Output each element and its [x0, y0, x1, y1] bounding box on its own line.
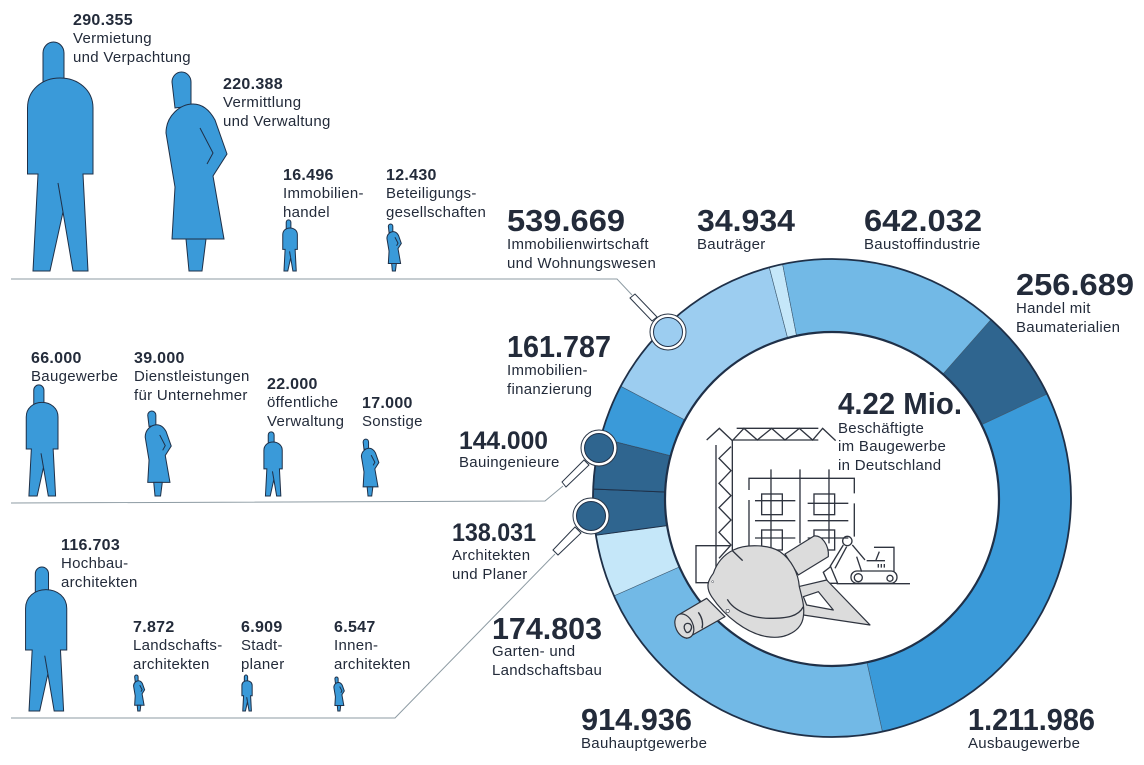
center total: im Baugewerbe — [838, 438, 946, 455]
segment: Immobilienwirtschaft und Wohnungswesen — [621, 267, 788, 420]
label: Immobilienfinanzierung — [507, 330, 611, 398]
segment: Handel mit Baumaterialien — [943, 320, 1047, 425]
label: Stadtplaner — [241, 619, 284, 673]
rolled plan lower — [671, 598, 725, 641]
label: Handel mit Baumaterialien: Baumaterialien — [1016, 319, 1120, 336]
label: Beteiligungsgesellschaften: Beteiligungs- — [386, 185, 477, 202]
label: Bauhauptgewerbe: 914.936 — [581, 703, 692, 737]
center total — [838, 387, 962, 474]
donut chart — [593, 259, 1071, 737]
figure: Stadtplaner — [242, 675, 252, 711]
label: Architekten und Planer: Architekten — [452, 547, 530, 564]
label: Ausbaugewerbe — [968, 703, 1095, 752]
excavator — [823, 536, 897, 583]
label: öffentliche Verwaltung — [267, 376, 344, 430]
label: Handel mit Baumaterialien: 256.689 — [1016, 268, 1134, 302]
label: Immobilienwirtschaft: 539.669 — [507, 204, 625, 238]
figure: öffentliche Verwaltung — [264, 432, 282, 496]
label: Sonstige: 17.000 — [362, 395, 413, 412]
label: Architekten und Planer: und Planer — [452, 566, 528, 583]
label: Vermietung und Verpachtung: 290.355 — [73, 12, 133, 29]
label: Baustoffindustrie: Baustoffindustrie — [864, 236, 981, 253]
label: Sonstige: Sonstige — [362, 413, 423, 430]
label: Immobilienwirtschaft — [507, 204, 656, 272]
label: Immobilienhandel: handel — [283, 204, 330, 221]
label: Immobilienhandel: Immobilien- — [283, 185, 364, 202]
label: Immobilienwirtschaft: Immobilienwirtschaft — [507, 236, 649, 253]
label: Vermietung und Verpachtung — [73, 12, 191, 66]
set square — [798, 580, 870, 625]
label: Innenarchitekten: 6.547 — [334, 619, 376, 636]
label: Baustoffindustrie: 642.032 — [864, 204, 982, 238]
label: Bauträger — [697, 204, 795, 253]
label: Vermietung und Verpachtung: Vermietung — [73, 30, 152, 47]
figure: Landschaftsarchitekten — [134, 675, 145, 711]
center total: in Deutschland — [838, 457, 941, 474]
label: Vermittlung und Verwaltung: und Verwaltung — [223, 113, 331, 130]
label: Sonstige — [362, 395, 423, 430]
label: Baugewerbe — [31, 350, 118, 385]
label: Garten- und Landschaftsbau: Landschaftsbau — [492, 662, 602, 679]
center total: Beschäftigte — [838, 420, 924, 437]
label: Architekten und Planer — [452, 519, 536, 583]
label: Bauingenieure: 144.000 — [459, 427, 548, 455]
label: Immobilienhandel — [283, 167, 364, 221]
label: Hochbauarchitekten: 116.703 — [61, 537, 120, 554]
figure: Dienstleistungen — [145, 411, 171, 496]
segment: Baustoffindustrie — [783, 259, 991, 374]
building — [696, 469, 910, 584]
label: Beteiligungsgesellschaften: 12.430 — [386, 167, 437, 184]
figure: Hochbauarchitekten — [26, 567, 67, 711]
helmet — [708, 546, 804, 637]
figure: Innenarchitekten — [334, 677, 344, 711]
label: öffentliche Verwaltung: öffentliche — [267, 394, 338, 411]
label: Innenarchitekten: architekten — [334, 656, 411, 673]
label: Immobilienfinanzierung: finanzierung — [507, 381, 592, 398]
segment: Garten- und Landschaftsbau — [596, 526, 680, 596]
label: Beteiligungsgesellschaften: gesellschaften — [386, 204, 486, 221]
label: Dienstleistungen: für Unternehmer — [134, 387, 248, 404]
label: Dienstleistungen: Dienstleistungen — [134, 368, 250, 385]
label: Hochbauarchitekten — [61, 537, 138, 591]
magnifier: Bauingenieure — [562, 430, 617, 487]
label: Innenarchitekten — [334, 619, 411, 673]
segment: Ausbaugewerbe — [867, 394, 1071, 732]
label: Architekten und Planer: 138.031 — [452, 519, 536, 547]
label: Landschaftsarchitekten — [133, 619, 222, 673]
magnifier: Architekten — [553, 498, 609, 555]
label: Ausbaugewerbe: Ausbaugewerbe — [968, 735, 1080, 752]
label: Vermittlung und Verwaltung: Vermittlung — [223, 94, 301, 111]
label: Dienstleistungen — [134, 350, 250, 404]
leader lines — [11, 279, 632, 718]
label: Stadtplaner: planer — [241, 656, 284, 673]
segment: Immobilienfinanzierung — [601, 386, 685, 456]
label: Immobilienwirtschaft: und Wohnungswesen — [507, 255, 656, 272]
label: Ausbaugewerbe: 1.211.986 — [968, 703, 1095, 737]
label: Hochbauarchitekten: Hochbau- — [61, 555, 128, 572]
label: Immobilienfinanzierung: Immobilien- — [507, 362, 588, 379]
label: Vermietung und Verpachtung: und Verpachtung — [73, 49, 191, 66]
label: Bauhauptgewerbe: Bauhauptgewerbe — [581, 735, 707, 752]
segment: Bauträger — [769, 264, 797, 338]
label: Dienstleistungen: 39.000 — [134, 350, 185, 367]
label: Bauträger: 34.934 — [697, 204, 795, 238]
figure: Sonstige — [361, 439, 379, 496]
label: öffentliche Verwaltung: 22.000 — [267, 376, 318, 393]
label: Stadtplaner: 6.909 — [241, 619, 283, 636]
magnifier: Immobilienwirtschaft — [630, 294, 686, 350]
label: Baustoffindustrie — [864, 204, 982, 253]
label: öffentliche Verwaltung: Verwaltung — [267, 413, 344, 430]
label: Baugewerbe: 66.000 — [31, 350, 82, 367]
label: Bauingenieure: Bauingenieure — [459, 454, 560, 471]
label: Immobilienhandel: 16.496 — [283, 167, 334, 184]
figure: Baugewerbe — [26, 385, 58, 496]
label: Baugewerbe: Baugewerbe — [31, 368, 118, 385]
label: Bauhauptgewerbe — [581, 703, 707, 752]
label: Handel mit Baumaterialien — [1016, 268, 1134, 336]
label: Vermittlung und Verwaltung — [223, 76, 331, 130]
center total: 4.22 Mio. — [838, 387, 962, 421]
label: Garten- und Landschaftsbau: Garten- und — [492, 643, 575, 660]
figure: Immobilienhandel — [283, 220, 297, 271]
label: Garten- und Landschaftsbau — [492, 612, 602, 679]
label: Beteiligungsgesellschaften — [386, 167, 486, 221]
figure: Vermittlung und Verwaltung — [166, 72, 227, 271]
illustration: construction site with helmet — [671, 428, 910, 641]
label: Stadtplaner: Stadt- — [241, 637, 283, 654]
label: Bauingenieure — [459, 427, 560, 471]
label: Bauträger: Bauträger — [697, 236, 766, 253]
figure: Beteiligungsgesellschaften — [387, 224, 401, 271]
segment: Architekten und Planer — [593, 489, 667, 535]
label: Handel mit Baumaterialien: Handel mit — [1016, 300, 1091, 317]
label: Immobilienfinanzierung: 161.787 — [507, 330, 611, 364]
segment: Bauhauptgewerbe — [614, 567, 882, 737]
label: Vermittlung und Verwaltung: 220.388 — [223, 76, 283, 93]
label: Landschaftsarchitekten: 7.872 — [133, 619, 175, 636]
label: Innenarchitekten: Innen- — [334, 637, 378, 654]
label: Hochbauarchitekten: architekten — [61, 574, 138, 591]
label: Landschaftsarchitekten: architekten — [133, 656, 210, 673]
crane — [707, 428, 836, 569]
label: Garten- und Landschaftsbau: 174.803 — [492, 612, 602, 646]
rolled plan upper — [785, 536, 828, 575]
segment: Bauingenieure — [593, 438, 671, 492]
figure: Vermietung und Verpachtung — [28, 42, 93, 271]
label: Landschaftsarchitekten: Landschafts- — [133, 637, 222, 654]
